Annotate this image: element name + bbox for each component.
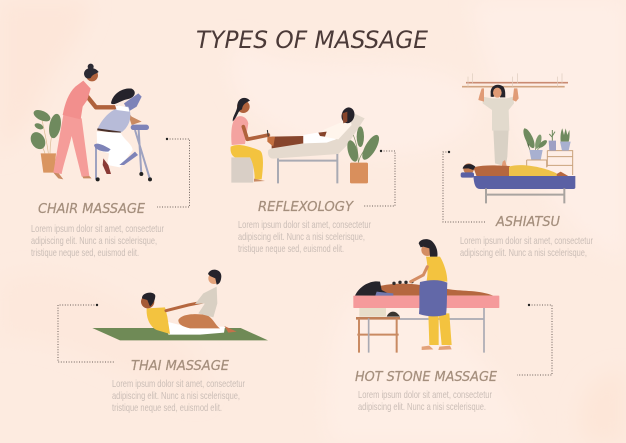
panel: thai massage bbox=[58, 270, 268, 414]
reflexology description: adipiscing elit. Nunc a nisi scelerisque, bbox=[238, 231, 365, 243]
title: TYPES OF MASSAGE bbox=[196, 26, 429, 54]
thai massage description: adipiscing elit. Nunc a nisi scelerisque, bbox=[112, 390, 240, 402]
chair massage description: tristique neque sed, euismod elit. bbox=[31, 247, 139, 259]
hot stone massage description: Lorem ipsum dolor sit amet, consectetur bbox=[358, 389, 492, 401]
reflexology description bbox=[238, 219, 371, 255]
panel: ashiatsu bbox=[443, 73, 593, 259]
chair massage description: Lorem ipsum dolor sit amet, consectetur bbox=[31, 223, 164, 235]
ashiatsu illustration bbox=[461, 73, 575, 203]
thai massage description: Lorem ipsum dolor sit amet, consectetur bbox=[112, 378, 245, 390]
thai massage description: tristique neque sed, euismod elit. bbox=[112, 402, 222, 414]
chair massage heading: CHAIR MASSAGE bbox=[38, 202, 146, 217]
ashiatsu connector dot bbox=[448, 151, 450, 153]
ashiatsu description bbox=[460, 235, 593, 259]
thai massage heading: THAI MASSAGE bbox=[131, 359, 230, 374]
chair massage connector bbox=[157, 139, 190, 207]
reflexology description: tristique neque sed, euismod elit. bbox=[238, 243, 344, 255]
hot stone massage description bbox=[358, 389, 492, 413]
hot stone massage connector bbox=[517, 305, 552, 375]
reflexology connector dot bbox=[380, 150, 382, 152]
thai massage illustration bbox=[92, 270, 268, 340]
reflexology heading: REFLEXOLOGY bbox=[258, 200, 354, 215]
hot stone massage illustration bbox=[353, 239, 499, 353]
hot stone massage heading: HOT STONE MASSAGE bbox=[355, 370, 498, 385]
thai massage connector bbox=[58, 305, 115, 362]
reflexology illustration bbox=[231, 98, 382, 183]
chair massage connector dot bbox=[166, 138, 168, 140]
thai massage connector dot bbox=[96, 304, 98, 306]
hot stone massage description: adipiscing elit. Nunc a nisi scelerisque. bbox=[358, 401, 486, 413]
chair massage description bbox=[31, 223, 164, 259]
panel: reflexology bbox=[231, 98, 395, 255]
ashiatsu connector bbox=[443, 152, 486, 222]
hot stone massage connector dot bbox=[528, 304, 530, 306]
panel: hot stone massage bbox=[353, 239, 552, 413]
thai massage description bbox=[112, 378, 245, 414]
panel: chair massage bbox=[28, 64, 189, 259]
ashiatsu heading: ASHIATSU bbox=[495, 215, 560, 230]
chair massage description: adipiscing elit. Nunc a nisi scelerisque, bbox=[31, 235, 157, 247]
reflexology description: Lorem ipsum dolor sit amet, consectetur bbox=[238, 219, 371, 231]
reflexology connector bbox=[364, 151, 395, 206]
chair massage illustration bbox=[28, 64, 152, 181]
